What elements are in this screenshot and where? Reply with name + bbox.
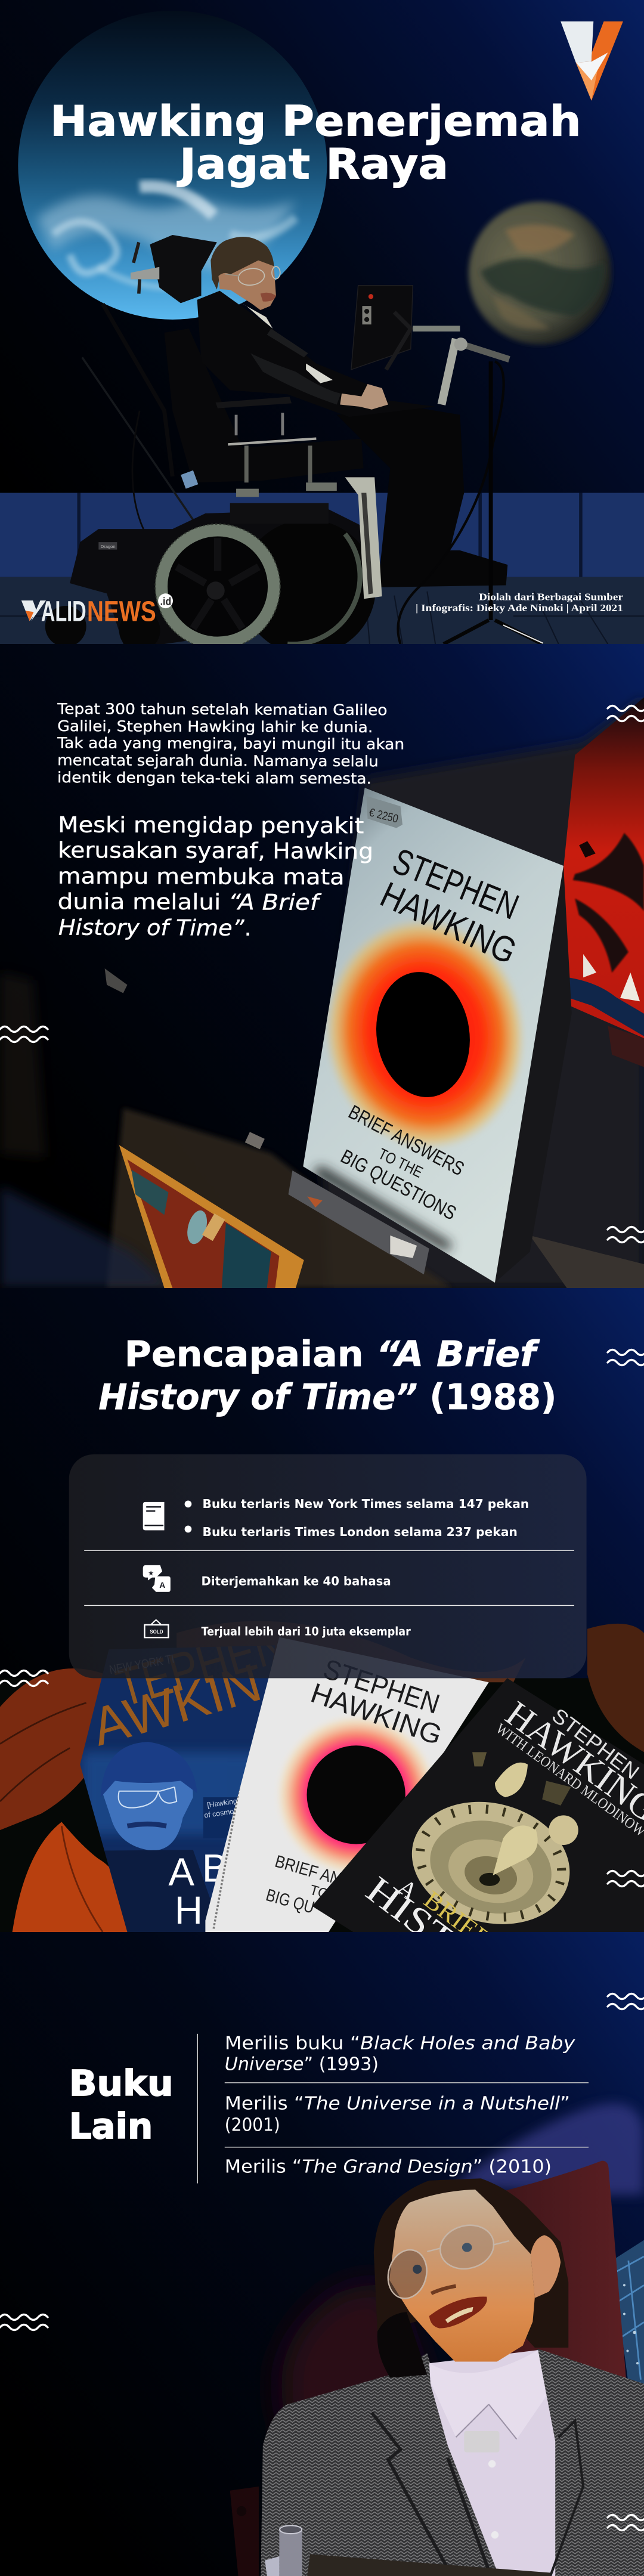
section 2: introduction: [0, 644, 644, 1288]
orange book below: [119, 1145, 304, 1288]
blue book: NEW YORK TI: [108, 1652, 175, 1677]
book: Brief Answers to the Big Questions: [303, 788, 572, 1283]
chair: [230, 2161, 644, 2576]
title: [50, 97, 581, 189]
section title: History of Time” (1988): [98, 1377, 556, 1417]
chair base and battery: [70, 509, 361, 644]
rear wheel: [240, 519, 376, 655]
white book: BRIEF AN: [273, 1852, 343, 1889]
book: Brief Answers to the Big Questions: BRIEF ANSWERS: [345, 1101, 467, 1180]
item 2001: [225, 2094, 570, 2135]
logo: ValidNews: ALID: [41, 595, 86, 627]
icon: book: [143, 1502, 165, 1530]
hand: [340, 384, 388, 410]
shelf backdrop: [0, 698, 644, 1288]
logo: ValidNews: NEWS: [87, 595, 156, 627]
book: Brief Answers to the Big Questions: TO THE: [376, 1144, 426, 1181]
icon: translation: A: [159, 1581, 165, 1590]
divider vertical: [197, 2034, 198, 2184]
icon: sold sign: [144, 1620, 168, 1637]
highlight paragraph: dunia melalui “A Brief: [58, 888, 322, 915]
mars: [469, 202, 612, 345]
wheelchair and Stephen Hawking: [45, 235, 543, 655]
heading: Buku Lain: [69, 2063, 174, 2147]
white book: HAWKING: [307, 1677, 446, 1751]
blue book: B: [202, 1846, 228, 1890]
blue book: of cosmolog: [203, 1806, 244, 1819]
blue book: AWKIN: [85, 1652, 268, 1757]
list of other books: [225, 2033, 589, 2178]
book: Brief Answers to the Big Questions: HAWKING: [374, 874, 523, 972]
icon: translation: ★: [148, 1569, 154, 1577]
blue book: TEPHEN: [110, 1613, 292, 1718]
heading: Buku Lain: Lain: [69, 2106, 153, 2147]
wheelchair and Stephen Hawking: Dragon: [101, 544, 116, 549]
black book: A Brief History of Time: [312, 1678, 644, 1932]
rear rigging: [82, 304, 197, 530]
black book: A Brief History of Time: HIST: [358, 1868, 462, 1961]
item 2001: Merilis “The Universe in a Nutshell ”: [225, 2094, 570, 2114]
bullets: [185, 1500, 191, 1532]
intro paragraph: Tepat 300 tahun setelah kematian Galileo: [57, 700, 388, 719]
item 1993: Universe” (1993): [225, 2054, 379, 2075]
icon: translation: [143, 1565, 171, 1592]
icon: sold sign: SOLD: [150, 1628, 163, 1634]
black book: A Brief History of Time: BRIEF: [419, 1885, 494, 1952]
heading: Buku Lain: Buku: [69, 2063, 174, 2104]
section title: [98, 1334, 556, 1417]
white book: TO: [308, 1882, 331, 1902]
intro paragraph: Galilei, Stephen Hawking lahir ke dunia.: [57, 717, 373, 736]
front wheel: [155, 524, 280, 649]
section 3: achievements: [0, 1288, 644, 1961]
item 2001: (2001): [225, 2114, 280, 2135]
item 1993: [225, 2033, 575, 2075]
head: [210, 237, 280, 329]
white book: BIG QU: [264, 1885, 317, 1918]
white book: [205, 1637, 489, 1932]
text: bestseller lists: Buku terlaris New York Times selama 147 pekan: [203, 1497, 529, 1511]
text: bestseller lists: [203, 1497, 529, 1539]
highlight paragraph: Meski mengidap penyakit: [58, 812, 364, 838]
credits: [416, 591, 623, 614]
credits: | Infografis: Dieky Ade Ninoki | April 2021: [416, 602, 623, 614]
title: Hawking Penerjemah: [50, 97, 581, 145]
portrait: head: [374, 2178, 568, 2377]
backdrop glow: [452, 2104, 644, 2388]
logo: ValidNews: .id: [160, 596, 171, 608]
control screen: [351, 286, 413, 370]
wave decorations: [0, 706, 644, 2531]
book holder: [289, 1171, 429, 1274]
icon: V logo: [561, 21, 623, 101]
logo: ValidNews: [21, 593, 173, 627]
portrait: jacket and shirt: [261, 2349, 644, 2576]
footrest and legs: [337, 407, 507, 587]
book: Brief Answers to the Big Questions: BIG QUESTIONS: [337, 1145, 460, 1225]
highlight paragraph: mampu membuka mata: [58, 863, 345, 890]
earth: [18, 11, 327, 320]
blue book: [80, 1646, 275, 1932]
blue book: H: [175, 1888, 203, 1932]
highlight paragraph: kerusakan syaraf, Hawking: [58, 837, 373, 864]
blue book: A: [168, 1850, 194, 1894]
seat back: [165, 329, 364, 482]
text: copies sold: Terjual lebih dari 10 juta eksemplar: [202, 1625, 411, 1639]
section 1: hero: [0, 0, 644, 644]
red book on right: [550, 698, 644, 1067]
torso: [197, 291, 435, 417]
section title: Pencapaian “A Brief: [125, 1334, 540, 1374]
portrait: console: [265, 2525, 550, 2576]
intro paragraph: [57, 700, 405, 787]
seat frame: [181, 397, 337, 524]
microphone arm: [398, 329, 543, 644]
black book: A Brief History of Time: A: [392, 1874, 423, 1907]
intro paragraph: Tak ada yang mengira, bayi mungil itu akan: [57, 734, 404, 753]
stage backdrop panels: [0, 493, 644, 644]
white book: STEPHEN: [320, 1653, 444, 1720]
autumn leaves: [0, 1621, 644, 1932]
section 4: other books: [0, 1932, 644, 2576]
metal strut: [345, 477, 382, 599]
blue book: [Hawking]: [206, 1797, 240, 1809]
item 2010: Merilis “The Grand Design ” (2010): [225, 2157, 552, 2178]
highlight paragraph: History of Time” .: [58, 915, 252, 941]
text: bestseller lists: Buku terlaris Times London selama 237 pekan: [203, 1525, 518, 1539]
intro paragraph: identik dengan teka-teki alam semesta.: [57, 769, 371, 787]
title: Jagat Raya: [177, 140, 448, 189]
text: translated: Diterjemahkan ke 40 bahasa: [202, 1574, 391, 1589]
panel: achievements card: [69, 1454, 587, 1678]
item 1993: Merilis buku “ Black Holes and Baby: [225, 2033, 575, 2054]
book: Brief Answers to the Big Questions: STEPHEN: [387, 840, 524, 927]
highlight paragraph: [57, 812, 373, 942]
black book: A Brief History of Time: STEPHEN: [547, 1704, 643, 1784]
headrest: [150, 235, 217, 303]
intro paragraph: mencatat sejarah dunia. Namanya selalu: [57, 751, 379, 770]
book: Brief Answers to the Big Questions: € 2250: [368, 806, 400, 826]
credits: Diolah dari Berbagai Sumber: [479, 591, 623, 602]
